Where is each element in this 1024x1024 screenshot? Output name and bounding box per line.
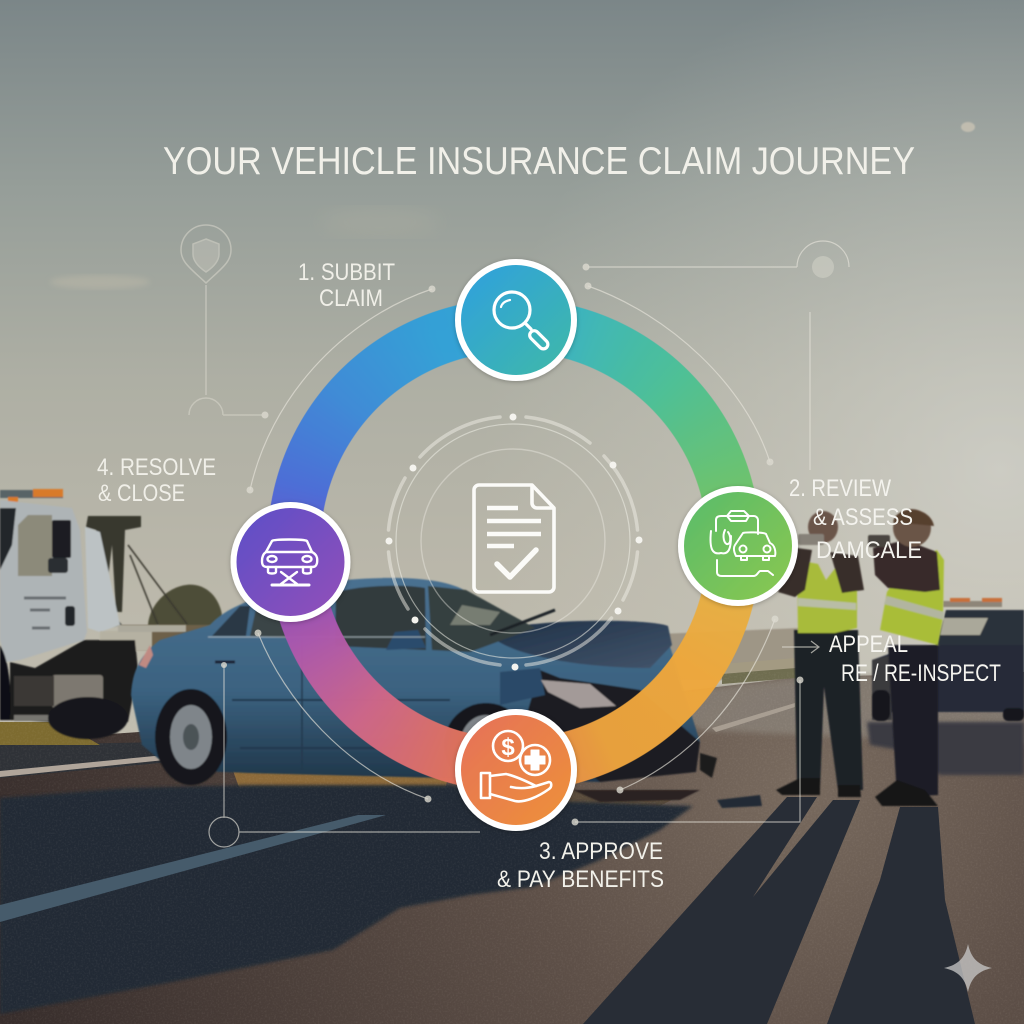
- blue sedan: [131, 578, 762, 808]
- label: step 1 submit claim: CLAIM: [319, 285, 383, 312]
- icon: sparkle watermark: [944, 944, 992, 992]
- inspector shadows: [583, 797, 860, 1024]
- title: YOUR VEHICLE INSURANCE CLAIM JOURNEY: [163, 140, 915, 183]
- label: step 3 approve and pay: [497, 838, 664, 893]
- icon: claim document with check mark: [474, 485, 554, 592]
- road surface: [0, 672, 1024, 1024]
- icon: clipboard, stethoscope and car: [710, 511, 775, 576]
- icon: hand receiving dollar and plus coins: [481, 731, 551, 801]
- progress ring with rainbow gradient: [267, 298, 761, 792]
- label: step 2 review and assess: DAMCALE: [816, 537, 922, 564]
- label: step 4 resolve and close: [97, 454, 216, 507]
- step 1 node: magnifier: [458, 262, 574, 378]
- decorative connector lines and dots: [209, 241, 849, 847]
- step 3 node: benefits payment: $: [501, 734, 515, 761]
- label: step 3 approve and pay: 3. APPROVE: [539, 838, 663, 865]
- tow truck: [0, 489, 187, 739]
- step 3 node: benefits payment: [458, 712, 574, 828]
- label: appeal re-inspect: APPEAL: [829, 631, 908, 658]
- distant tree line: [120, 585, 800, 680]
- police car in background: [867, 598, 1024, 775]
- label: appeal re-inspect: [829, 631, 1001, 687]
- label: step 4 resolve and close: 4. RESOLVE: [97, 454, 216, 481]
- label: step 2 review and assess: 2. REVIEW: [789, 475, 891, 502]
- label: step 3 approve and pay: & PAY BENEFITS: [497, 866, 664, 893]
- step 2 node: damage inspection: [681, 489, 795, 603]
- label: step 1 submit claim: [298, 259, 395, 312]
- arrow to appeal: [782, 641, 819, 653]
- label: step 2 review and assess: [789, 475, 922, 564]
- step 4 node: car on lift: [234, 505, 348, 619]
- label: step 1 submit claim: 1. SUBBIT: [298, 259, 395, 286]
- sunlit orange patch under car: [232, 768, 450, 790]
- long shadow across road: [0, 785, 693, 1014]
- center gauge rings: [388, 417, 638, 665]
- label: step 2 review and assess: & ASSESS: [813, 504, 913, 531]
- icon: shield location pin: [181, 225, 262, 415]
- icon: magnifying glass: [494, 292, 550, 351]
- road markings: [0, 815, 386, 922]
- label: step 4 resolve and close: & CLOSE: [98, 480, 185, 507]
- two inspectors in vests: [776, 509, 944, 806]
- icon: car on scissor jack: [262, 540, 317, 585]
